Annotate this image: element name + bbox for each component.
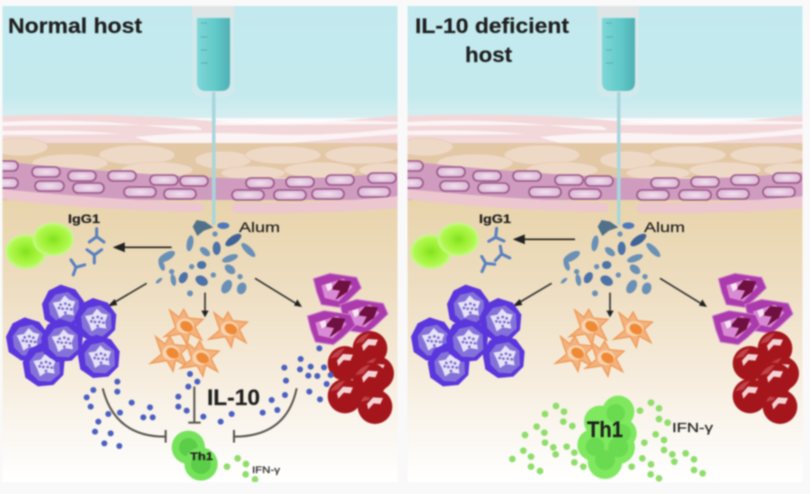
panel: normal host [0, 6, 411, 483]
orange dendritic cell cluster [555, 309, 652, 376]
arrow: alum to plasma cells [515, 236, 575, 243]
skin layers, syringe and needle [2, 6, 398, 434]
red cell cluster [328, 331, 394, 424]
label: Alum: Alum [239, 219, 280, 235]
blue cell cluster [6, 285, 120, 386]
IFN-gamma dots [509, 399, 706, 482]
purple cell cluster [712, 273, 793, 345]
title: normal host: Normal host [8, 15, 142, 38]
title: IL-10 deficient host: host [465, 44, 512, 67]
purple cell cluster [307, 273, 388, 345]
icons: IgG1 antibodies [475, 228, 510, 272]
arrow: alum to plasma cells [115, 244, 172, 251]
alum particles [155, 220, 257, 296]
label: Th1: Th1 [190, 451, 213, 463]
icons: IgG1 antibodies [66, 229, 104, 277]
arrows: alum to other cells [107, 278, 302, 317]
blue cell cluster [411, 285, 525, 386]
orange dendritic cell cluster [150, 309, 247, 376]
label: Alum: Alum [644, 219, 685, 235]
label: IFN-gamma: IFN-γ [252, 465, 280, 476]
label: IgG1: IgG1 [68, 212, 100, 226]
IFN-gamma dots [224, 455, 258, 483]
panel: IL-10 deficient host [397, 6, 810, 482]
title: IL-10 deficient host: IL-10 deficient [415, 15, 569, 38]
inhibition lines to Th1 [103, 387, 297, 443]
icon: IgG1-producing plasma cells [5, 223, 74, 269]
label: Th1: Th1 [587, 417, 623, 442]
cells, arrows and cytokines: IL-10 deficient host [410, 220, 799, 482]
alum particles [560, 220, 662, 296]
icon: IgG1-producing plasma cells [410, 223, 479, 269]
skin layers, syringe and needle [406, 6, 804, 434]
cells, arrows and cytokines: normal host [5, 220, 394, 483]
Th1 cell [172, 431, 218, 481]
label: IgG1: IgG1 [479, 212, 511, 226]
label: IFN-gamma: IFN-γ [672, 420, 714, 435]
IL-10 dots [84, 345, 334, 449]
red cell cluster [733, 331, 799, 424]
arrows: alum to other cells [512, 278, 707, 317]
Th1 cell cluster [577, 396, 637, 479]
label: IL-10: IL-10 [207, 385, 260, 410]
